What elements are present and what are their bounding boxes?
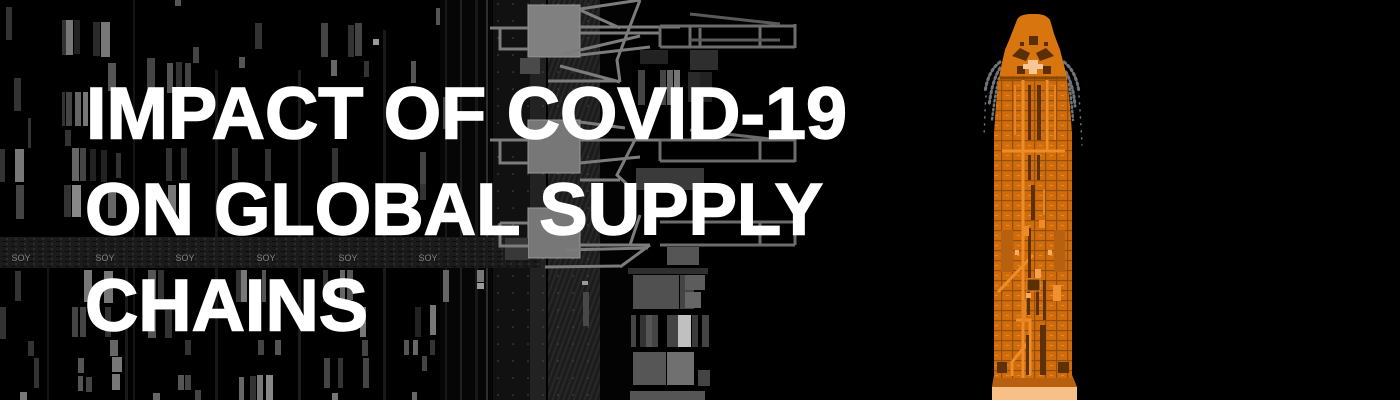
bow machinery <box>998 14 1070 78</box>
road band with SOY markings: SOY <box>418 253 438 263</box>
ship hull and deck <box>990 10 1080 400</box>
stern deck <box>990 378 1080 400</box>
ship illustration <box>984 10 1082 400</box>
road band with SOY markings: SOY <box>175 253 195 263</box>
central pipework <box>998 80 1065 380</box>
trucks on quay <box>477 270 589 326</box>
dark deck structures <box>997 85 1069 375</box>
crane 3 <box>500 208 795 267</box>
road band with SOY markings: SOY <box>95 253 115 263</box>
title: ON GLOBAL SUPPLY <box>85 170 823 250</box>
title: IMPACT OF COVID-19 <box>86 74 847 154</box>
background: aerial photo of container port <box>0 0 795 400</box>
crane 1 <box>490 0 795 82</box>
road band with SOY markings: SOY <box>11 253 31 263</box>
title: CHAINS <box>85 266 368 346</box>
deck panels <box>1001 220 1065 322</box>
road band with SOY markings <box>0 237 540 268</box>
quay lanes <box>47 0 632 400</box>
ship container stacks <box>628 70 712 400</box>
road band with SOY markings: SOY <box>256 253 276 263</box>
crane 2 <box>490 120 795 190</box>
stacked containers, left yard <box>0 0 449 400</box>
ship wake spray <box>984 62 1082 145</box>
title <box>85 74 847 346</box>
infographic banner <box>0 0 1083 400</box>
road band with SOY markings: SOY <box>338 253 358 263</box>
